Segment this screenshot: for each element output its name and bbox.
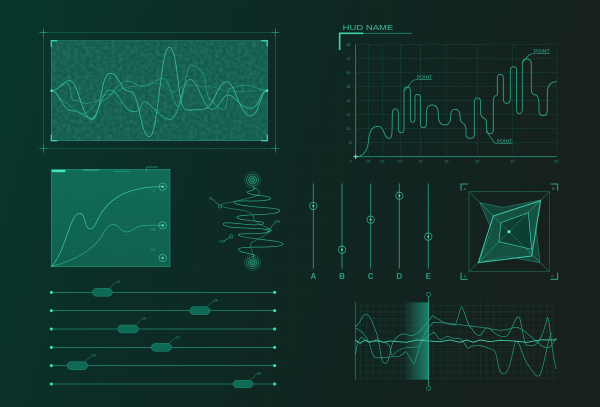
origin marker: [353, 154, 358, 159]
axis labels: 10: [348, 141, 352, 145]
corner letters: D: [464, 273, 467, 278]
leader labels: 008: [219, 239, 225, 243]
curve labels: [150, 189, 156, 252]
callout: point top left: [405, 74, 433, 90]
pill labels: [92, 280, 261, 376]
pill labels: 05: [92, 353, 96, 357]
signal lines: [355, 307, 557, 376]
outer frame with corner crosses: [39, 29, 279, 153]
axis labels: 10°: [380, 159, 386, 163]
curve labels: 01: [152, 189, 156, 193]
title bracket: [340, 33, 412, 50]
axis labels: 50: [347, 85, 351, 89]
leader labels: 01: [209, 197, 213, 201]
radar polygons: [478, 200, 541, 263]
axis labels: 40: [347, 99, 351, 103]
callout: point lower: [486, 131, 513, 143]
axis labels: 10°: [418, 159, 424, 163]
pill labels: 0n: [176, 335, 180, 339]
pill labels: 01: [117, 280, 121, 284]
axis labels: 20: [347, 127, 351, 131]
pill labels: 08: [257, 372, 261, 376]
left scale: [354, 302, 357, 380]
slider letters: E: [426, 272, 432, 281]
panel: vertical sliders: [310, 183, 432, 281]
curve labels: 008: [150, 248, 156, 252]
axis labels: 10°: [398, 159, 403, 163]
pill leaders: [84, 282, 257, 381]
noisy screen: [51, 41, 267, 141]
slider letters: D: [396, 272, 402, 281]
pill labels: 08: [214, 298, 218, 302]
panel: waveform frame: [39, 29, 279, 153]
track ends: [50, 291, 276, 385]
end nodes: [50, 89, 268, 92]
highlighted band: [403, 302, 429, 380]
bottom rings: [245, 255, 261, 271]
axis labels: [347, 43, 560, 163]
end markers: [159, 183, 166, 262]
axis labels: 60: [347, 71, 351, 75]
top tabs: [52, 167, 158, 172]
panel: multi-line signal chart: [355, 292, 557, 390]
slider tracks: [51, 292, 275, 384]
range pills: [67, 288, 253, 388]
data curve: [356, 59, 557, 157]
chart title: HUD NAME: [343, 25, 394, 32]
top rings: [245, 172, 261, 188]
slider letters: C: [368, 272, 374, 281]
axis labels: 10°: [366, 159, 372, 163]
grid: [355, 302, 557, 380]
callout: point top right: POINT: [534, 48, 550, 53]
corner brackets: [461, 184, 558, 279]
leader labels: 008: [275, 220, 280, 224]
axis labels: 10°: [475, 159, 481, 163]
axis labels: 80: [347, 43, 351, 47]
panel: radar chart: [461, 184, 558, 279]
panel: line chart: [340, 25, 560, 163]
axis labels: 70: [347, 57, 351, 61]
axis labels: 10°: [510, 159, 516, 163]
curve labels: 008: [150, 228, 156, 232]
axis labels: 0: [350, 159, 352, 163]
leader labels: [209, 197, 280, 243]
wiggle lines: [221, 187, 283, 257]
radar frame: [469, 192, 549, 272]
grid screen: [51, 169, 170, 267]
axis labels: 10°: [554, 159, 560, 163]
cursor line with end markers: [427, 292, 431, 390]
callout: point lower: POINT: [497, 138, 513, 143]
panel: horizontal sliders: [50, 280, 276, 388]
corner letters: B: [552, 186, 555, 191]
panel: spiral wave: [209, 172, 283, 271]
axis labels: 10°: [444, 159, 450, 163]
corner letters: C: [551, 273, 554, 278]
axis labels: 30: [347, 113, 351, 117]
panel: area curve chart: [51, 167, 170, 267]
waveform lines: [51, 47, 267, 137]
corner letters: [464, 186, 555, 278]
slider letters: A: [310, 272, 316, 281]
slider tracks: [313, 183, 428, 269]
callout: point top right: [522, 48, 550, 62]
callout: point top left: POINT: [417, 74, 433, 79]
corner letters: A: [464, 186, 467, 191]
grid and axes: [356, 44, 557, 157]
slider letters: [310, 272, 432, 281]
slider letters: B: [339, 272, 345, 281]
slider knobs: [310, 192, 432, 253]
pill labels: 08: [142, 317, 146, 321]
curves: [51, 187, 163, 267]
